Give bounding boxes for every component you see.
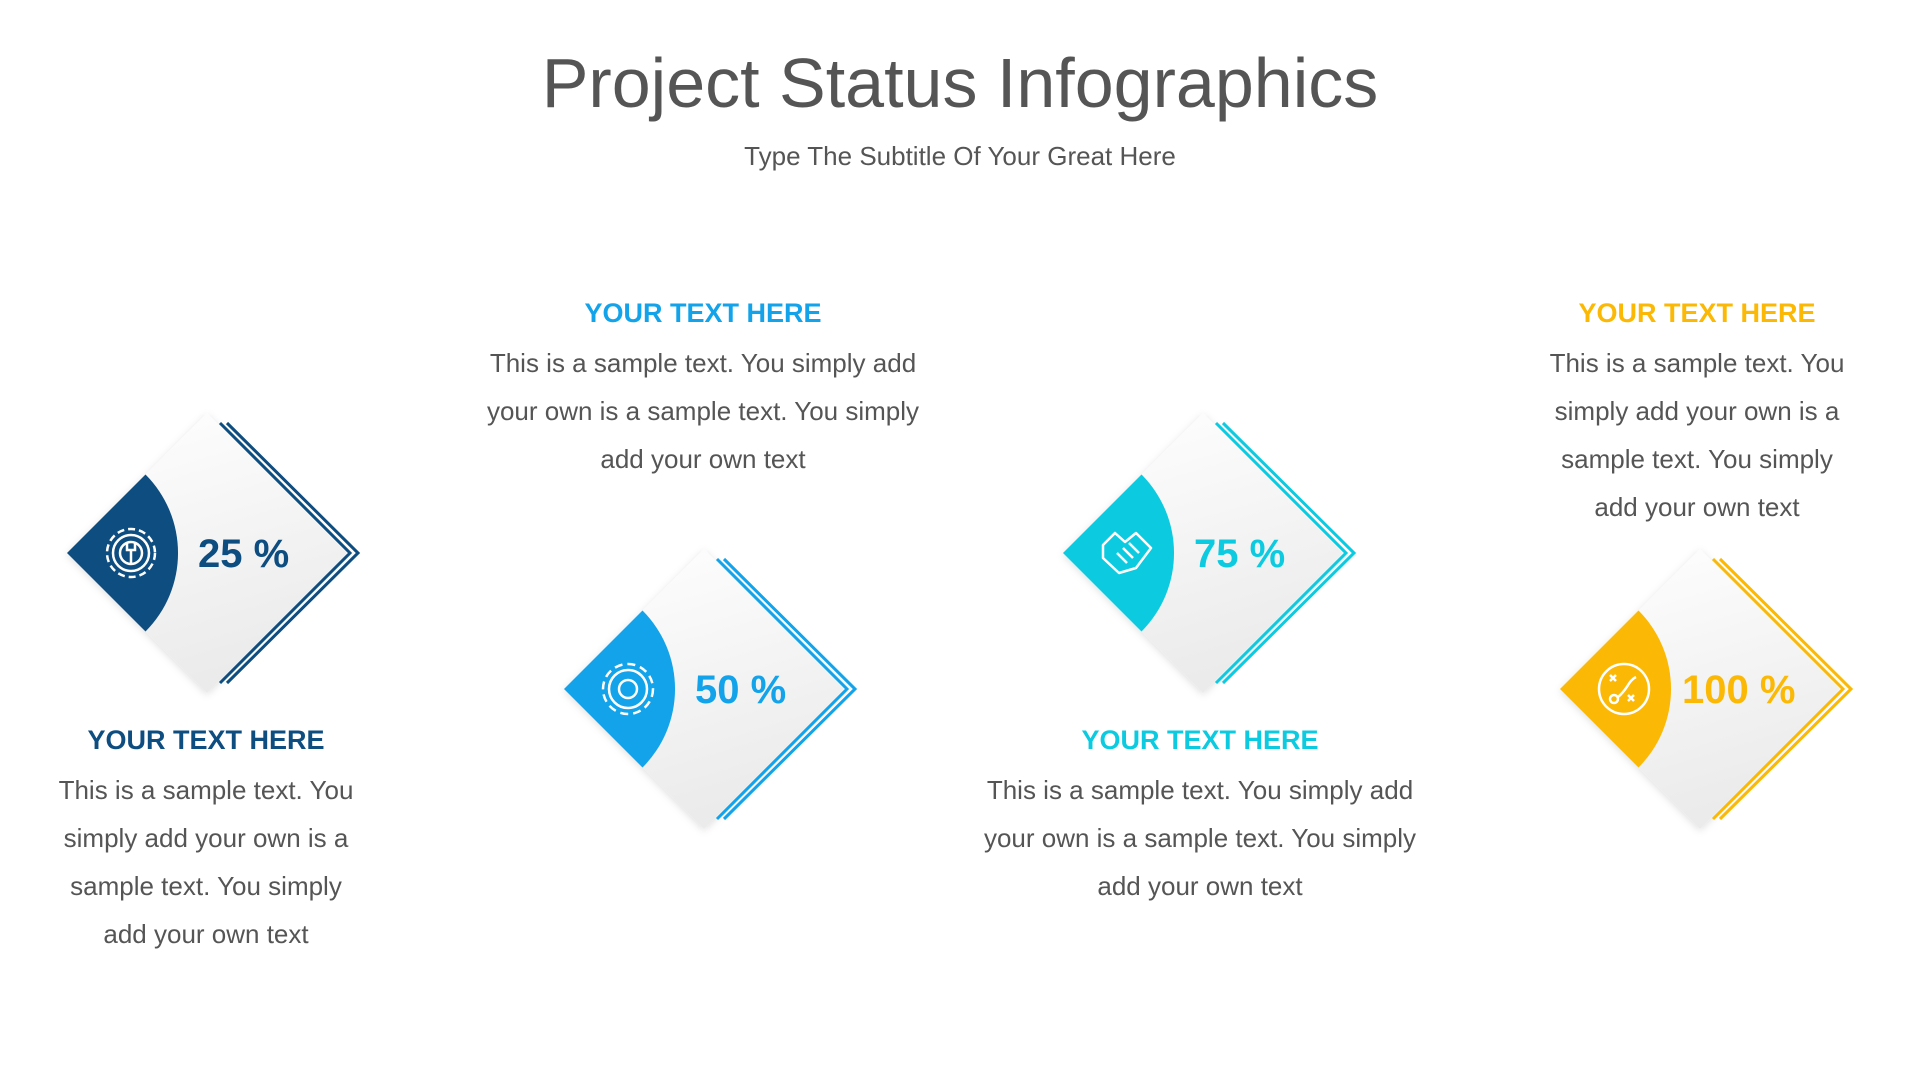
text block 3: add your own text [1097, 871, 1303, 901]
text block 2: your own is a sample text. You simply [487, 396, 919, 426]
text block 2: YOUR TEXT HERE [584, 298, 822, 328]
text block 4: sample text. You simply [1561, 444, 1833, 474]
diamond 3: 75%: 75 % [1194, 532, 1285, 576]
title: Project Status Infographics [542, 44, 1378, 122]
text block 4 [1550, 298, 1844, 522]
diamond 2: 50%: 50 % [695, 668, 786, 712]
text block 1: YOUR TEXT HERE [87, 725, 325, 755]
text block 1: This is a sample text. You [59, 775, 353, 805]
diamond 1: 25%: 25 % [198, 532, 289, 576]
diamond 2: 50% [564, 549, 855, 829]
text block 2: This is a sample text. You simply add [490, 348, 916, 378]
text block 3 [984, 725, 1416, 901]
text block 3: your own is a sample text. You simply [984, 823, 1416, 853]
text block 4: simply add your own is a [1555, 396, 1839, 426]
diamond 4: 100%: 100 % [1682, 668, 1795, 712]
text block 4: YOUR TEXT HERE [1578, 298, 1816, 328]
diamond 1: 25% [67, 413, 358, 693]
diamond 4: 100% [1560, 549, 1851, 829]
text block 1: simply add your own is a [64, 823, 348, 853]
text block 1 [59, 725, 353, 949]
text block 4: This is a sample text. You [1550, 348, 1844, 378]
icon: handshake [1103, 533, 1151, 573]
text block 4: add your own text [1594, 492, 1800, 522]
text block 1: add your own text [103, 919, 309, 949]
subtitle: Type The Subtitle Of Your Great Here [744, 141, 1176, 171]
text block 3: YOUR TEXT HERE [1081, 725, 1319, 755]
text block 1: sample text. You simply [70, 871, 342, 901]
text block 2: add your own text [600, 444, 806, 474]
icon: gear wrench [107, 529, 155, 577]
icon: gear [603, 664, 653, 714]
icon: strategy [1599, 664, 1649, 714]
text block 3: This is a sample text. You simply add [987, 775, 1413, 805]
text block 2 [487, 298, 919, 474]
diamond 3: 75% [1063, 413, 1354, 693]
